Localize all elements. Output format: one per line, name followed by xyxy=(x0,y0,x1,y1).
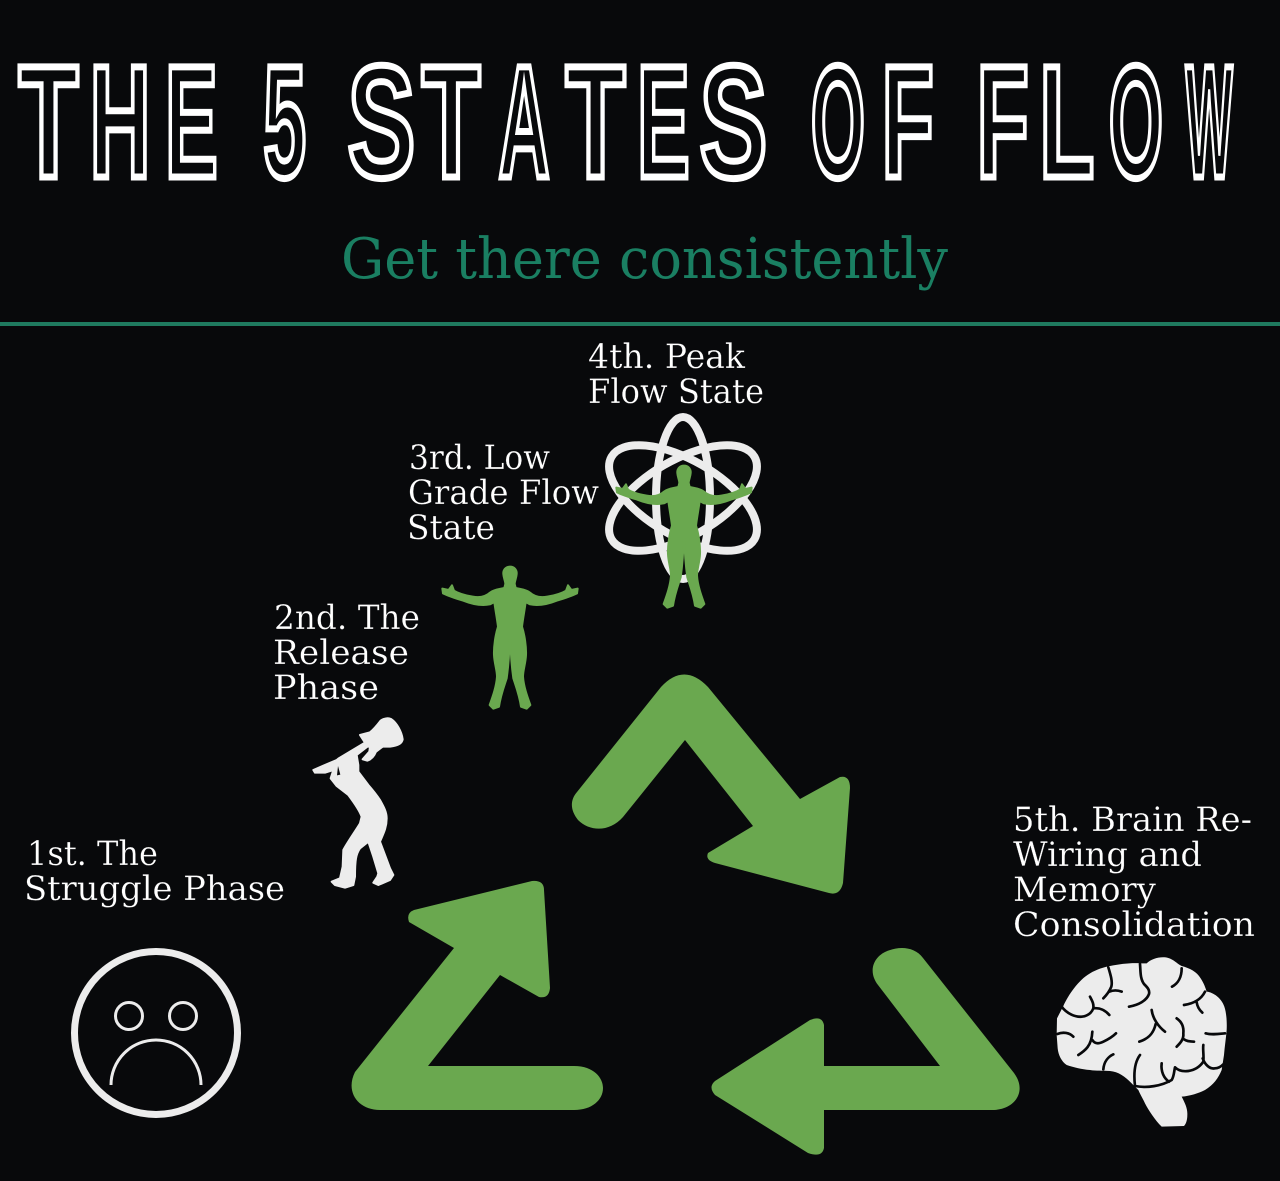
title: O xyxy=(1109,32,1163,211)
icon: brain xyxy=(1057,957,1227,1127)
label: 2nd the release phase: Phase xyxy=(273,668,379,708)
title: F xyxy=(976,32,1029,211)
label: 2nd the release phase: Release xyxy=(273,633,409,673)
label: 5th brain re-wiring and memory consolidation: 5th. Brain Re- xyxy=(1013,800,1252,840)
title: F xyxy=(882,32,934,211)
arrow: lower left cycle arrow xyxy=(352,881,603,1110)
title: A xyxy=(498,32,550,211)
title: T xyxy=(566,32,626,211)
label: 4th peak flow state: Flow State xyxy=(588,372,764,412)
icon: atom with figure xyxy=(593,417,773,608)
icon: guitar smashing silhouette xyxy=(313,718,403,888)
title: O xyxy=(811,32,865,211)
icon: figure at release phase xyxy=(442,567,578,709)
arrow: lower right cycle arrow xyxy=(712,948,1020,1155)
title: E xyxy=(165,32,218,211)
label: 5th brain re-wiring and memory consolidation: Consolidation xyxy=(1013,905,1255,945)
title: T xyxy=(18,32,78,211)
title: 5 xyxy=(263,32,306,211)
label: 2nd the release phase: 2nd. The xyxy=(274,598,420,638)
title: H xyxy=(90,32,151,211)
label: 5th brain re-wiring and memory consolidation xyxy=(1013,800,1255,945)
label: 4th peak flow state xyxy=(588,337,764,412)
label: 3rd low grade flow state xyxy=(407,438,599,548)
label: 3rd low grade flow state: 3rd. Low xyxy=(409,438,550,478)
label: 2nd the release phase xyxy=(273,598,420,708)
label: 3rd low grade flow state: Grade Flow xyxy=(408,473,599,513)
title: T xyxy=(422,32,480,211)
label: 1st the struggle phase: 1st. The xyxy=(27,834,158,874)
label: 5th brain re-wiring and memory consolidation: Wiring and xyxy=(1013,835,1202,875)
label: 1st the struggle phase xyxy=(24,834,285,909)
title: L xyxy=(1039,32,1094,211)
subtitle: Get there consistently xyxy=(341,227,948,292)
label: 5th brain re-wiring and memory consolidation: Memory xyxy=(1013,870,1157,910)
title: S xyxy=(700,32,767,211)
label: 1st the struggle phase: Struggle Phase xyxy=(24,869,285,909)
title: S xyxy=(348,32,415,211)
label: 3rd low grade flow state: State xyxy=(407,508,495,548)
icon: sad face xyxy=(74,952,238,1114)
title: E xyxy=(637,32,690,211)
label: 4th peak flow state: 4th. Peak xyxy=(588,337,745,377)
arrow: top cycle arrow xyxy=(572,674,850,894)
